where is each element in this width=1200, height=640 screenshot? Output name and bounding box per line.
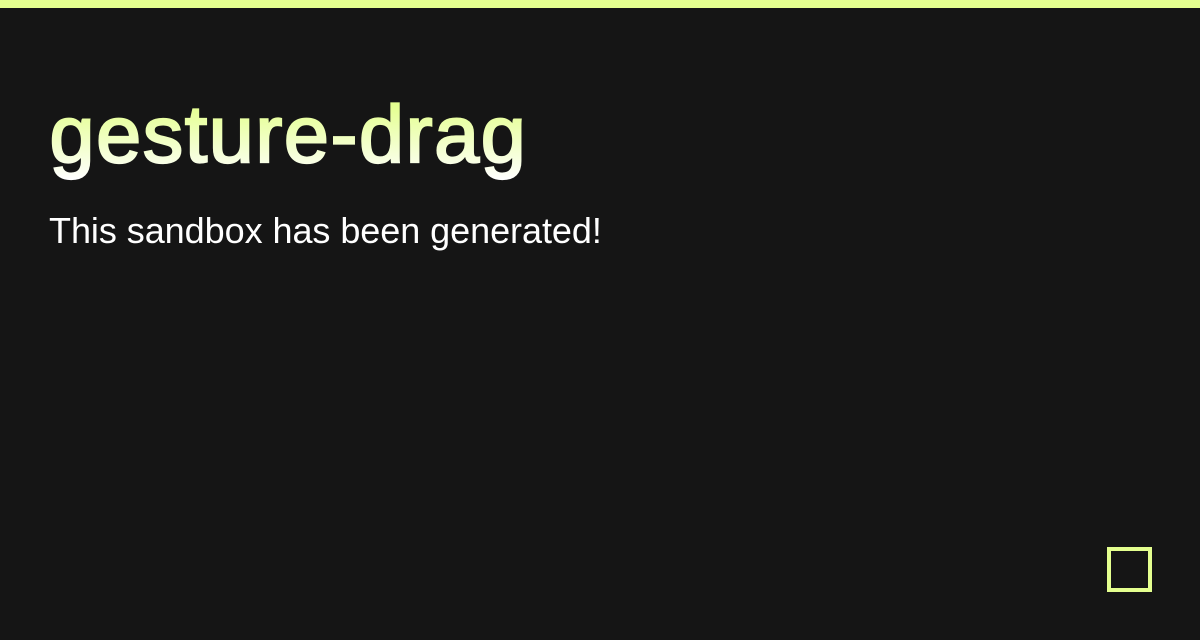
subtitle: This sandbox has been generated! [49,210,602,251]
top accent bar [0,0,1200,8]
title: gesture-drag [50,90,527,180]
icon: logo square [1107,547,1152,592]
